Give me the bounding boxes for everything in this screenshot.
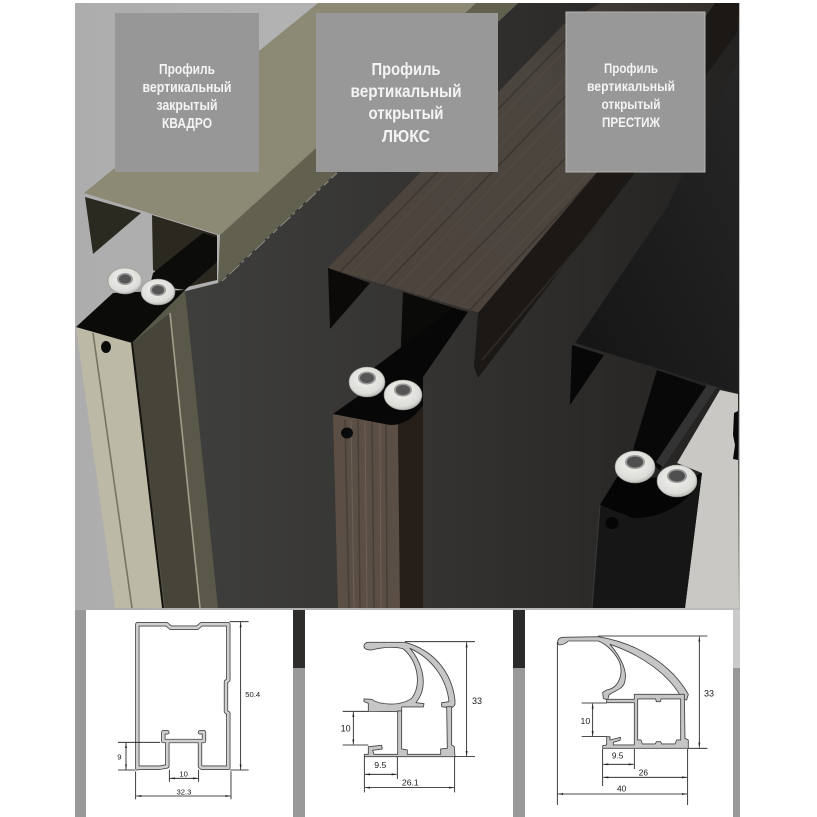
label: prestige: открытый <box>602 96 660 112</box>
icon: rollers prestige <box>615 451 697 497</box>
panel: lower strip backgrounds <box>75 610 740 817</box>
stile: black prestige <box>592 473 702 608</box>
label: lux: Профиль <box>372 59 441 79</box>
label: prestige <box>566 12 705 172</box>
label: prestige: Профиль <box>604 60 658 76</box>
label: quadro <box>115 13 259 172</box>
profile section: lux <box>341 642 482 792</box>
label: quadro: КВАДРО <box>162 116 212 132</box>
profile section: lux: 33 <box>472 696 482 706</box>
profile section: quadro <box>117 622 261 799</box>
profile section: quadro: 32.3 <box>177 788 191 797</box>
profile section: prestige: 33 <box>704 689 714 699</box>
stile: wood lux <box>333 390 423 608</box>
profile section: lux: 9.5 <box>374 760 387 770</box>
panel: prestige drawing <box>525 610 733 817</box>
profile section: lux: 10 <box>341 724 351 734</box>
label: quadro: закрытый <box>156 98 218 114</box>
label: lux: открытый <box>368 103 444 123</box>
label: quadro: вертикальный <box>142 80 232 96</box>
panel: quadro drawing <box>86 610 293 817</box>
profile section: prestige: 26 <box>639 767 648 777</box>
label: lux: ЛЮКС <box>382 126 430 146</box>
label: prestige: ПРЕСТИЖ <box>602 114 660 130</box>
panel: product photo <box>75 3 740 610</box>
profile section: prestige: 9.5 <box>612 751 624 761</box>
profile section: quadro: 10 <box>179 769 188 778</box>
panel: lux drawing <box>305 610 513 817</box>
stile: olive quadro <box>76 290 218 608</box>
label: prestige: вертикальный <box>587 78 675 94</box>
profile section: prestige: 10 <box>581 716 590 726</box>
profile section: quadro: 50.4 <box>245 690 261 699</box>
profile section: prestige: 40 <box>617 783 627 793</box>
label: lux: вертикальный <box>350 81 462 101</box>
label: quadro: Профиль <box>159 62 215 78</box>
profile section: quadro: 9 <box>117 752 121 761</box>
profile section: prestige <box>557 636 714 805</box>
label: lux <box>316 13 498 172</box>
icon: rollers quadro <box>108 268 175 305</box>
icon: rollers lux <box>349 367 422 410</box>
profile section: lux: 26.1 <box>402 778 419 788</box>
